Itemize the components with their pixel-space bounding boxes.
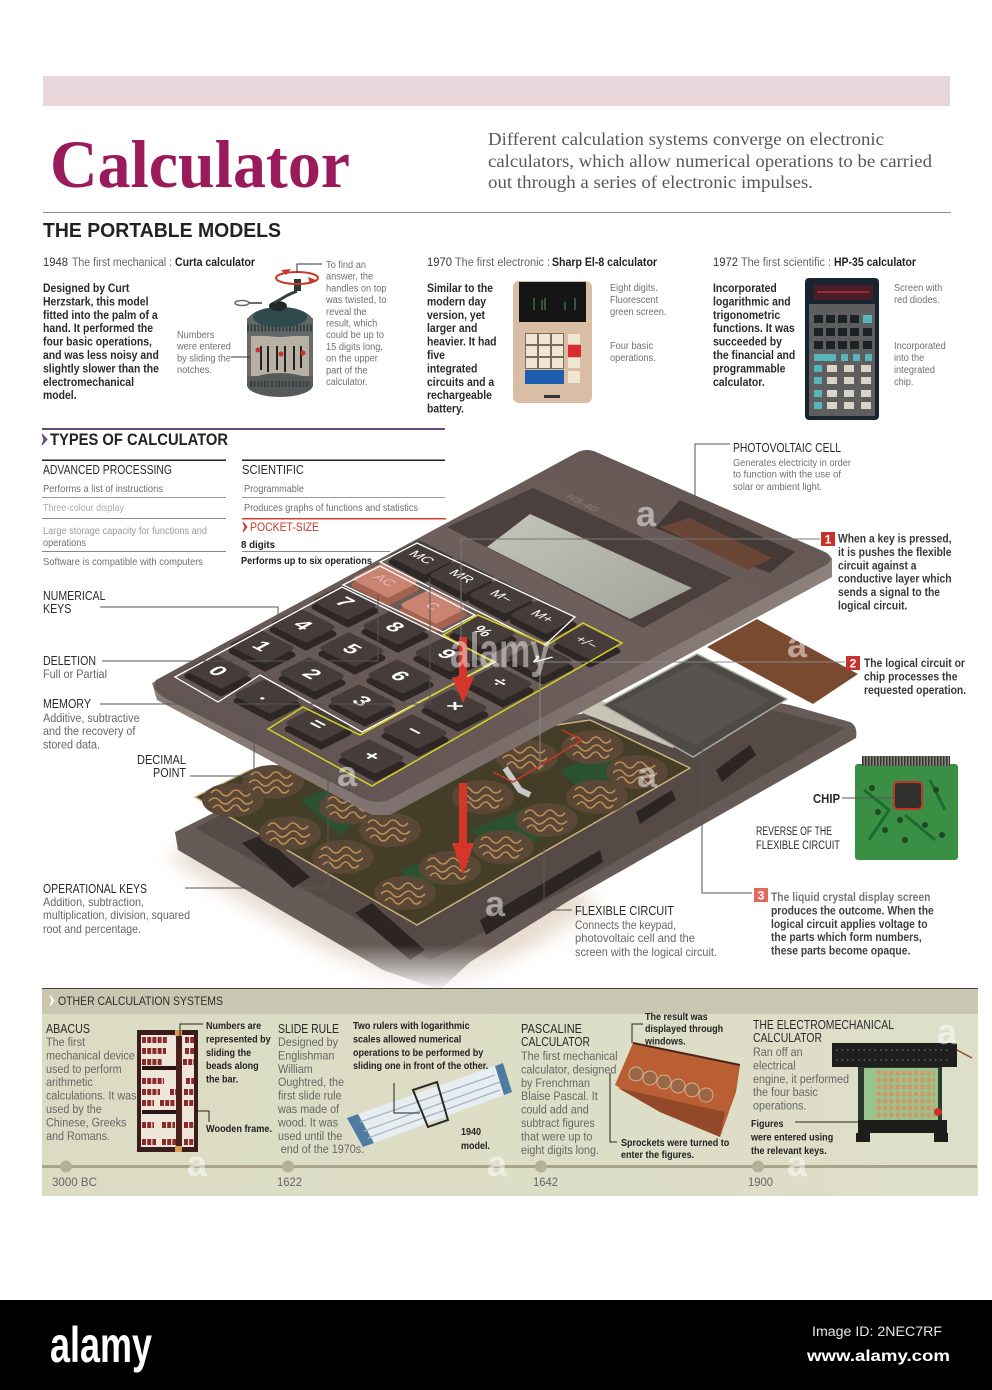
description: calculator. bbox=[713, 376, 765, 389]
pascaline text: subtract figures bbox=[521, 1118, 595, 1130]
pascaline notes bbox=[621, 1011, 729, 1161]
label: memory: and the recovery of bbox=[43, 726, 136, 738]
slide rule text bbox=[277, 1022, 364, 1156]
bottom tray bbox=[150, 690, 856, 992]
pascaline text: eight digits long. bbox=[521, 1144, 599, 1157]
description: fitted into the palm of a bbox=[43, 309, 158, 322]
label: flexible circuit bbox=[575, 904, 717, 959]
description: succeeded by bbox=[713, 336, 783, 349]
electromechanical text: electrical bbox=[753, 1060, 796, 1073]
heading: types of calculator: TYPES OF CALCULATOR bbox=[50, 430, 228, 449]
keypad: 6 bbox=[384, 668, 415, 684]
label: operational keys: Addition, subtraction, bbox=[43, 895, 144, 909]
slide rule notes: operations to be performed by bbox=[353, 1047, 484, 1059]
model heading 1972: 1972 bbox=[713, 257, 738, 269]
timeline: 1622 bbox=[277, 1175, 302, 1189]
electromechanical text: operations. bbox=[753, 1100, 806, 1113]
note: digits: Fluorescent bbox=[610, 295, 658, 306]
note: numbers: Numbers bbox=[177, 330, 214, 341]
exploded calculator illustration bbox=[150, 450, 958, 1000]
icon: pascaline bbox=[610, 1024, 740, 1142]
label: deletion: DELETION bbox=[43, 654, 96, 668]
pascaline text: PASCALINE bbox=[521, 1022, 582, 1036]
slide rule text: wood. It was bbox=[277, 1117, 338, 1130]
slide rule notes bbox=[353, 1020, 490, 1152]
note: screen: red diodes. bbox=[894, 295, 940, 306]
panel: other calculation systems bbox=[42, 988, 978, 1196]
table: scientific: Performs up to six operations bbox=[241, 555, 372, 567]
calculator body bbox=[152, 450, 832, 815]
description: slightly slower than the bbox=[43, 363, 159, 376]
pascaline notes: displayed through bbox=[645, 1024, 723, 1035]
label: photovoltaic cell: Generates electricity in order bbox=[733, 457, 851, 469]
abacus text bbox=[46, 1022, 137, 1143]
callout 1: When a key is pressed, bbox=[838, 533, 952, 546]
watermarks: a bbox=[937, 1011, 958, 1052]
model heading 1948 bbox=[43, 257, 255, 269]
table: advanced processing: Software is compatible with computers bbox=[43, 556, 203, 568]
slide rule text: Englishman bbox=[278, 1050, 334, 1063]
slide rule text: Oughtred, the bbox=[278, 1077, 344, 1089]
connector strip bbox=[580, 700, 680, 748]
label: decimal point bbox=[137, 753, 186, 780]
description: model. bbox=[43, 390, 77, 402]
abacus text: arithmetic bbox=[46, 1077, 93, 1089]
watermarks: a bbox=[485, 883, 506, 924]
description: battery. bbox=[427, 403, 464, 416]
electromechanical notes: were entered using bbox=[750, 1132, 833, 1144]
note: handles: answer, the bbox=[326, 271, 374, 283]
callout 2: chip processes the bbox=[864, 671, 957, 684]
operational keys outline bbox=[268, 615, 622, 786]
timeline: 1642 bbox=[533, 1175, 558, 1189]
note: handles: was twisted, to bbox=[325, 295, 387, 306]
abacus notes: sliding the bbox=[206, 1047, 252, 1059]
pascaline text: could add and bbox=[521, 1104, 589, 1117]
abacus text: used to perform bbox=[46, 1063, 122, 1076]
website: www.alamy.com bbox=[806, 1348, 950, 1365]
LCD display bbox=[487, 514, 692, 619]
label: deletion bbox=[43, 654, 107, 681]
slide rule text: end of the 1970s. bbox=[281, 1144, 364, 1156]
callout 2: requested operation. bbox=[864, 684, 966, 697]
note: digits: green screen. bbox=[610, 307, 666, 318]
label: chip: CHIP bbox=[813, 792, 840, 806]
description: electromechanical bbox=[43, 376, 134, 389]
callout 1 bbox=[821, 532, 952, 613]
icon: electromechanical calculator bbox=[795, 1043, 972, 1142]
label: flexible circuit: screen with the logical circuit. bbox=[575, 945, 717, 959]
note: numbers: by sliding the bbox=[177, 353, 231, 365]
electromechanical text: the four basic bbox=[753, 1087, 818, 1099]
label: decimal point: POINT bbox=[153, 766, 186, 780]
flexible circuit board bbox=[195, 720, 690, 925]
abacus notes: Wooden frame. bbox=[206, 1123, 272, 1135]
abacus text: calculations. It was bbox=[46, 1090, 137, 1103]
keypad: M+ bbox=[527, 608, 559, 624]
label: operational keys: root and percentage. bbox=[43, 922, 141, 936]
callout 3 bbox=[754, 888, 934, 958]
brown ribbon bbox=[707, 619, 858, 704]
abacus notes: beads along bbox=[206, 1061, 259, 1072]
label: numerical keys: KEYS bbox=[43, 602, 72, 616]
electromechanical text bbox=[753, 1018, 894, 1113]
keypad: % bbox=[468, 623, 498, 639]
watermarks: a bbox=[187, 1143, 208, 1184]
label: deletion: Full or Partial bbox=[43, 667, 107, 681]
keypad: √ bbox=[525, 651, 555, 667]
keypad: 5 bbox=[336, 641, 367, 657]
label: photovoltaic cell: solar or ambient light. bbox=[733, 481, 822, 493]
label: reverse of the flexible circuit: FLEXIBLE CIRCUIT bbox=[756, 840, 840, 852]
keypad: AC bbox=[369, 572, 401, 588]
slide rule notes: model. bbox=[461, 1140, 490, 1152]
model heading 1970: 1970 bbox=[427, 257, 452, 269]
table: scientific: SCIENTIFIC bbox=[242, 463, 304, 477]
model heading 1972: HP-35 calculator bbox=[834, 257, 916, 269]
model mark: HS-4G bbox=[562, 493, 602, 514]
description: integrated bbox=[427, 363, 478, 376]
abacus notes: represented by bbox=[206, 1034, 271, 1046]
soft shadow bbox=[170, 830, 600, 1000]
heading: types of calculator bbox=[42, 428, 445, 449]
keypad: 2 bbox=[296, 666, 327, 682]
keypad bbox=[187, 543, 618, 779]
keypad: 4 bbox=[287, 617, 318, 633]
electromechanical text: engine, it performed bbox=[753, 1073, 849, 1086]
table: advanced processing: ADVANCED PROCESSING bbox=[43, 463, 172, 477]
callout 1: logical circuit. bbox=[838, 600, 907, 613]
model heading 1970: The first electronic : bbox=[455, 257, 550, 269]
description: five bbox=[427, 349, 445, 362]
description: larger and bbox=[427, 323, 478, 335]
panel: Curta calculator bbox=[43, 257, 387, 402]
keypad: = bbox=[302, 716, 333, 732]
abacus text: Chinese, Greeks bbox=[46, 1117, 127, 1130]
note: handles: could be up to bbox=[326, 330, 384, 341]
pascaline notes: Sprockets were turned to bbox=[621, 1137, 729, 1149]
callout 2: The logical circuit or bbox=[864, 657, 965, 670]
keypad: + bbox=[356, 748, 387, 764]
icon: HP-35 calculator bbox=[805, 278, 879, 420]
display bezel bbox=[447, 488, 732, 628]
slide rule notes: sliding one in front of the other. bbox=[353, 1061, 489, 1072]
pascaline text: by Frenchman bbox=[521, 1077, 590, 1090]
pascaline text: Blaise Pascal. It bbox=[521, 1091, 599, 1103]
keypad: − bbox=[399, 723, 430, 739]
table: advanced processing: operations bbox=[43, 537, 86, 549]
memory keys outline bbox=[380, 543, 575, 645]
note: chip: into the bbox=[894, 353, 925, 364]
heading: the portable models: THE PORTABLE MODELS bbox=[43, 219, 281, 242]
description: logarithmic and bbox=[713, 296, 791, 309]
description: modern day bbox=[427, 296, 487, 309]
pascaline text bbox=[521, 1022, 618, 1157]
intro text: calculators, which allow numerical operations to be carried bbox=[488, 151, 932, 171]
note: handles: To find an bbox=[326, 260, 366, 271]
callout 2: 2 bbox=[850, 656, 857, 670]
note: digits: Eight digits. bbox=[610, 283, 658, 294]
pascaline text: that were up to bbox=[521, 1131, 592, 1144]
electromechanical notes: the relevant keys. bbox=[751, 1145, 827, 1157]
photovoltaic cell bbox=[660, 518, 772, 570]
note: chip: integrated bbox=[894, 365, 935, 376]
note: chip: Incorporated bbox=[894, 341, 946, 352]
watermarks: a bbox=[787, 624, 808, 665]
slide rule notes: Two rulers with logarithmic bbox=[353, 1020, 470, 1032]
note: operations: operations. bbox=[610, 353, 656, 364]
description: version, yet bbox=[427, 309, 485, 322]
watermarks: a bbox=[337, 753, 358, 794]
watermarks: a bbox=[637, 754, 658, 795]
keypad: 8 bbox=[379, 619, 410, 635]
description: Herzstark, this model bbox=[43, 296, 148, 309]
arrow: key press bbox=[452, 637, 474, 703]
pascaline notes: The result was bbox=[645, 1011, 708, 1023]
keypad: × bbox=[439, 698, 470, 714]
label: photovoltaic cell: to function with the use of bbox=[733, 468, 841, 480]
electromechanical text: Ran off an bbox=[753, 1047, 803, 1059]
model heading 1948: Curta calculator bbox=[175, 257, 255, 269]
description: programmable bbox=[713, 363, 785, 376]
note: handles: result, which bbox=[326, 318, 377, 330]
table: scientific: Programmable bbox=[244, 483, 304, 495]
keypad: 3 bbox=[346, 693, 377, 709]
label: flexible circuit: photovoltaic cell and the bbox=[575, 931, 695, 945]
footer bar bbox=[0, 1300, 992, 1390]
slide rule notes: scales allowed numerical bbox=[353, 1034, 462, 1046]
label: memory: MEMORY bbox=[43, 697, 92, 711]
callout 1: circuit against a bbox=[838, 560, 917, 573]
note: handles: handles on top bbox=[326, 283, 387, 295]
pascaline text: The first mechanical bbox=[521, 1051, 618, 1063]
description: functions. It was bbox=[713, 323, 795, 335]
callout 3: The liquid crystal display screen bbox=[771, 891, 931, 904]
description: the financial and bbox=[713, 349, 795, 362]
label: operational keys: OPERATIONAL KEYS bbox=[43, 882, 147, 896]
reverse circuit board bbox=[855, 756, 958, 860]
keypad: 7 bbox=[329, 594, 360, 610]
electromechanical text: CALCULATOR bbox=[753, 1031, 822, 1045]
note: operations: Four basic bbox=[610, 341, 653, 352]
icon: Sharp calculator bbox=[513, 281, 592, 403]
watermarks: a bbox=[487, 1143, 508, 1184]
chip bbox=[894, 782, 922, 809]
table: scientific bbox=[241, 460, 446, 567]
panel heading: OTHER CALCULATION SYSTEMS bbox=[58, 994, 223, 1008]
callout 3: produces the outcome. When the bbox=[771, 905, 934, 918]
note: handles: 15 digits long, bbox=[326, 341, 383, 353]
keypad: MC bbox=[405, 548, 439, 566]
icon: Curta crank calculator bbox=[235, 269, 318, 397]
keypad: . bbox=[254, 690, 279, 703]
note: chip: chip. bbox=[894, 377, 913, 388]
number keys outline bbox=[175, 587, 495, 732]
model heading 1948: 1948 bbox=[43, 257, 68, 269]
callout 2 bbox=[846, 656, 966, 697]
keypad: 9 bbox=[431, 646, 462, 662]
abacus notes: Numbers are bbox=[206, 1020, 262, 1032]
abacus text: used by the bbox=[46, 1104, 102, 1116]
callout 3: 3 bbox=[758, 888, 765, 902]
keypad: +/− bbox=[571, 634, 603, 650]
pascaline text: CALCULATOR bbox=[521, 1035, 590, 1049]
callout 3: these parts become opaque. bbox=[771, 945, 910, 958]
description: trigonometric bbox=[713, 309, 780, 322]
pascaline notes: windows. bbox=[644, 1036, 686, 1048]
keypad: M− bbox=[486, 588, 518, 604]
label: flexible circuit: Connects the keypad, bbox=[575, 918, 676, 932]
table: scientific: 8 digits bbox=[241, 539, 275, 551]
description: rechargeable bbox=[427, 390, 492, 402]
red signal path bbox=[493, 730, 582, 782]
panel: HP-35 calculator bbox=[713, 257, 946, 420]
label: reverse of the flexible circuit: REVERSE OF THE bbox=[756, 826, 832, 838]
solar cell housing bbox=[655, 500, 795, 573]
note: handles: calculator. bbox=[326, 377, 368, 388]
model heading 1970 bbox=[427, 257, 657, 269]
note: handles: part of the bbox=[326, 365, 368, 376]
timeline: 3000 BC bbox=[52, 1175, 97, 1189]
alamy logo: alamy bbox=[50, 1317, 152, 1373]
label: memory bbox=[43, 697, 140, 752]
watermarks: a bbox=[787, 1143, 808, 1184]
abacus text: ABACUS bbox=[46, 1022, 90, 1036]
label: decimal point: DECIMAL bbox=[137, 753, 186, 767]
slide rule text: first slide rule bbox=[278, 1090, 342, 1103]
leader lines bbox=[100, 444, 893, 910]
table: advanced processing: Performs a list of instructions bbox=[43, 483, 163, 495]
pascaline text: calculator, designed bbox=[521, 1064, 616, 1077]
icon: slide rule bbox=[347, 1063, 512, 1147]
note: numbers: were entered bbox=[176, 341, 231, 353]
keypad: MR bbox=[445, 567, 479, 585]
timeline bbox=[42, 1160, 977, 1189]
label: memory: Additive, subtractive bbox=[43, 713, 140, 725]
abacus text: and Romans. bbox=[46, 1130, 110, 1143]
description: and was less noisy and bbox=[43, 349, 159, 362]
header band bbox=[43, 76, 950, 106]
electromechanical text: THE ELECTROMECHANICAL bbox=[753, 1018, 894, 1032]
description: Designed by Curt bbox=[43, 282, 130, 295]
callout 3: the parts which form numbers, bbox=[771, 932, 922, 944]
note: numbers: notches. bbox=[177, 365, 212, 376]
deletion keys outline bbox=[343, 566, 475, 632]
table: advanced processing: Three-colour display bbox=[43, 502, 125, 514]
abacus text: mechanical device bbox=[46, 1050, 135, 1063]
label: numerical keys: NUMERICAL bbox=[43, 589, 106, 603]
description: circuits and a bbox=[427, 376, 495, 389]
slide rule text: SLIDE RULE bbox=[278, 1022, 339, 1036]
slide rule text: William bbox=[278, 1063, 313, 1076]
slide rule notes: 1940 bbox=[461, 1126, 482, 1138]
label: operational keys: multiplication, division, squared bbox=[43, 908, 190, 922]
slide rule text: was made of bbox=[277, 1104, 340, 1116]
label: reverse of the flexible circuit bbox=[756, 826, 840, 852]
model heading 1948: The first mechanical : bbox=[72, 257, 172, 269]
description: Similar to the bbox=[427, 282, 493, 295]
model heading 1972: The first scientific : bbox=[741, 257, 831, 269]
timeline: 1900 bbox=[748, 1175, 773, 1189]
description: heavier. It had bbox=[427, 336, 497, 349]
icon: abacus bbox=[137, 1030, 198, 1152]
title: Calculator bbox=[50, 126, 350, 202]
watermarks: alamy bbox=[450, 625, 550, 678]
note: handles: on the upper bbox=[326, 353, 378, 365]
abacus notes: the bar. bbox=[206, 1074, 238, 1086]
watermarks: a bbox=[636, 493, 657, 534]
table: advanced processing: Large storage capacity for functions and bbox=[43, 525, 207, 537]
callout 3: logical circuit applies voltage to bbox=[771, 918, 928, 931]
intro text bbox=[488, 129, 932, 192]
label: photovoltaic cell bbox=[733, 441, 851, 493]
keypad: 1 bbox=[246, 638, 277, 654]
model heading 1972 bbox=[713, 257, 916, 269]
callout 1: 1 bbox=[825, 532, 832, 546]
electromechanical notes: Figures bbox=[751, 1118, 784, 1130]
label: memory: stored data. bbox=[43, 739, 100, 752]
label: flexible circuit: FLEXIBLE CIRCUIT bbox=[575, 904, 674, 918]
callout 1: conductive layer which bbox=[838, 573, 952, 586]
note: handles: reveal the bbox=[326, 306, 367, 318]
keypad: C bbox=[422, 600, 444, 612]
description: four basic operations, bbox=[43, 336, 152, 349]
abacus text: The first bbox=[46, 1037, 86, 1049]
description: Incorporated bbox=[713, 282, 777, 295]
label: operational keys bbox=[43, 882, 190, 936]
watermarks bbox=[187, 493, 958, 1184]
slide rule text: Designed by bbox=[278, 1037, 338, 1049]
description: hand. It performed the bbox=[43, 323, 153, 335]
note: screen: Screen with bbox=[894, 283, 942, 294]
image id: Image ID: 2NEC7RF bbox=[812, 1324, 942, 1339]
table: scientific: POCKET-SIZE bbox=[250, 520, 319, 534]
arrow: to circuit bbox=[452, 783, 474, 875]
keypad: ÷ bbox=[485, 674, 515, 690]
intro text: Different calculation systems converge on electronic bbox=[488, 129, 884, 149]
table: advanced processing bbox=[42, 460, 226, 568]
panel: Sharp EL-8 calculator bbox=[427, 257, 666, 416]
label: photovoltaic cell: PHOTOVOLTAIC CELL bbox=[733, 441, 841, 455]
liquid crystal screen bbox=[603, 654, 787, 757]
slide rule text: used until the bbox=[278, 1130, 342, 1143]
intro text: out through a series of electronic impulses. bbox=[488, 172, 813, 192]
table: scientific: Produces graphs of functions and statistics bbox=[244, 502, 418, 514]
pascaline notes: enter the figures. bbox=[621, 1149, 694, 1161]
keypad: 0 bbox=[202, 663, 233, 679]
model heading 1970: Sharp El-8 calculator bbox=[552, 257, 657, 269]
callout 1: sends a signal to the bbox=[838, 586, 940, 599]
callout 1: it is pushes the flexible bbox=[838, 546, 952, 559]
abacus notes bbox=[180, 1020, 272, 1135]
